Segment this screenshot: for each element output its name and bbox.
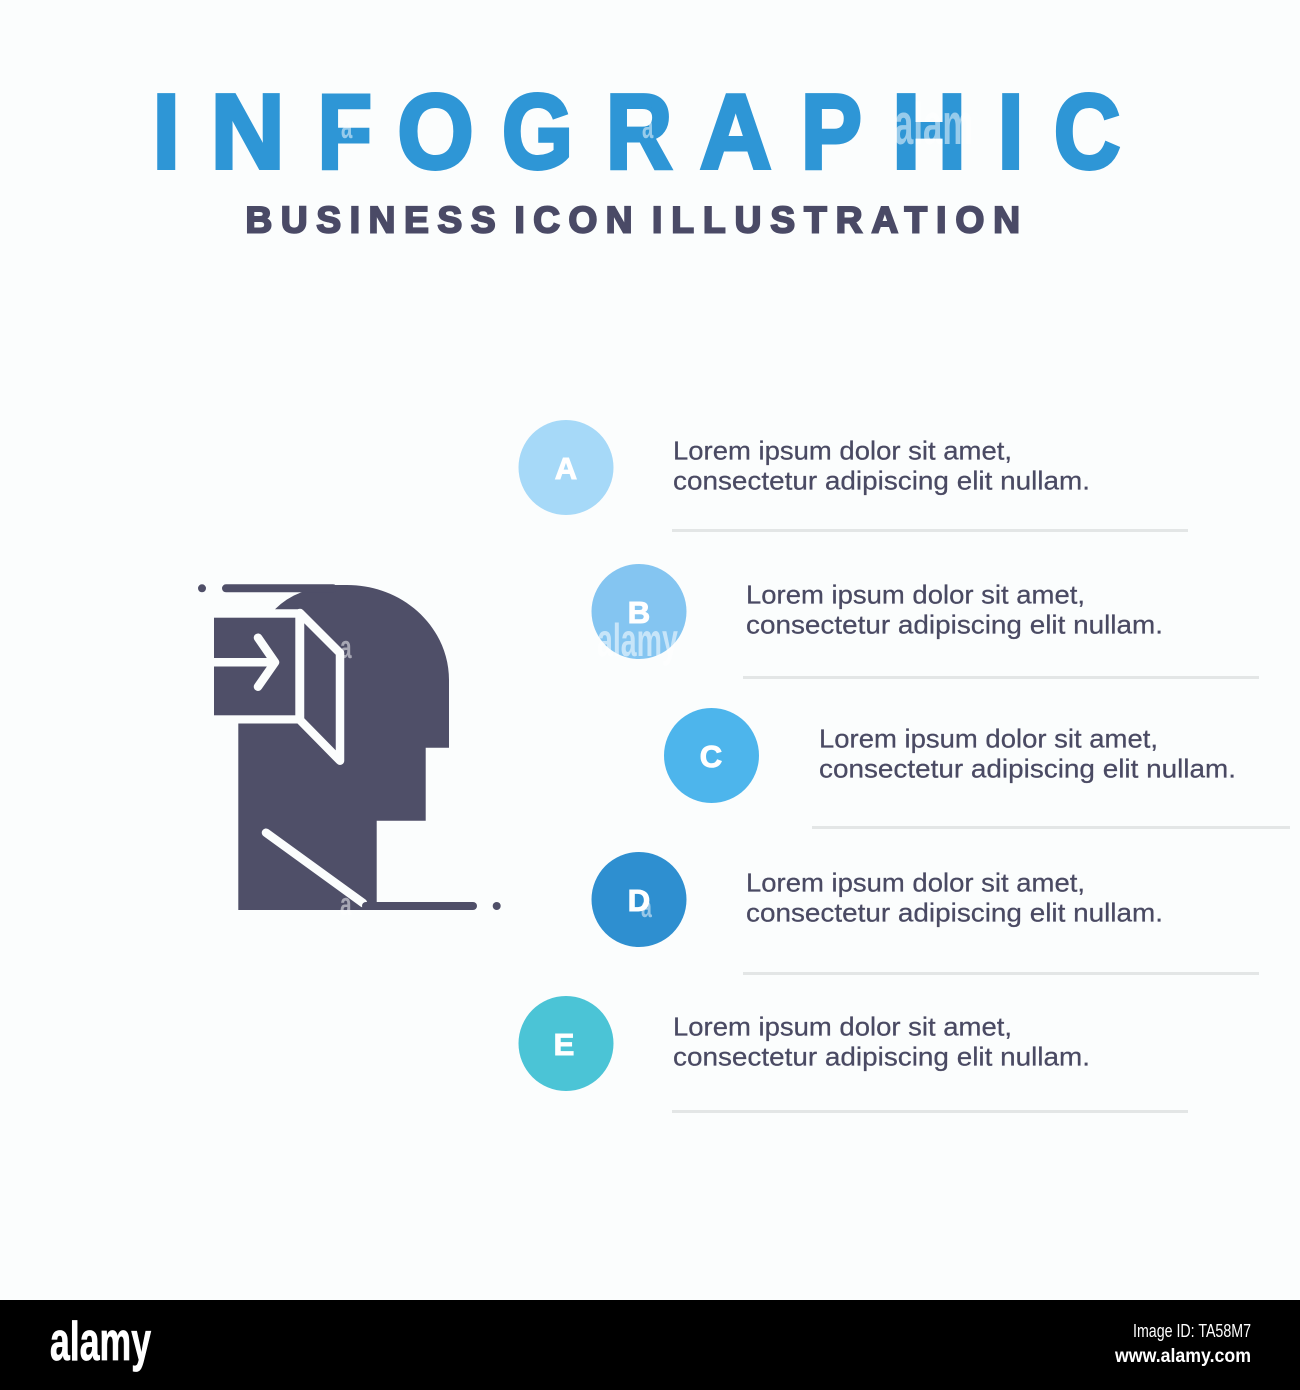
footer bar: [0, 1300, 1300, 1390]
subtitle: BUSINESS ICON ILLUSTRATION: BUSINESS: [246, 200, 496, 241]
title: INFOGRAPHIC: O: [397, 73, 474, 191]
letter A: A: [555, 451, 577, 486]
title: INFOGRAPHIC: A: [700, 72, 772, 191]
text C: [819, 724, 1236, 784]
title: INFOGRAPHIC: C: [1054, 73, 1120, 191]
text D: Lorem ipsum dolor sit amet,: [746, 868, 1085, 898]
text C: consectetur adipiscing elit nullam.: [819, 754, 1236, 784]
circle E: [518, 996, 614, 1091]
website: www.alamy.com: [1114, 1346, 1251, 1367]
icon watermark fragments: a: [340, 630, 352, 665]
icon watermark fragments: [340, 630, 352, 922]
title: INFOGRAPHIC: I: [998, 73, 1024, 191]
step A: [518, 420, 1188, 532]
title: INFOGRAPHIC: R: [606, 73, 672, 192]
text B: [746, 580, 1163, 640]
title watermark fragments: a: [642, 108, 654, 145]
text D: consectetur adipiscing elit nullam.: [746, 898, 1163, 928]
letter D: D: [628, 883, 650, 918]
text E: Lorem ipsum dolor sit amet,: [673, 1012, 1012, 1042]
text E: [673, 1012, 1090, 1072]
text D: [746, 868, 1163, 928]
icon: head with door and arrow: [198, 584, 501, 910]
title: INFOGRAPHIC: I: [152, 72, 180, 191]
text A: Lorem ipsum dolor sit amet,: [673, 436, 1012, 466]
circle B: [592, 564, 686, 659]
title watermark fragments: alam: [894, 93, 973, 157]
icon watermark fragments: a: [340, 887, 352, 922]
subtitle: BUSINESS ICON ILLUSTRATION: ILLUSTRATION: [652, 200, 1020, 241]
subtitle: BUSINESS ICON ILLUSTRATION: [246, 200, 1020, 241]
text E: consectetur adipiscing elit nullam.: [673, 1042, 1090, 1072]
top bar and dot: [226, 584, 333, 592]
text B: consectetur adipiscing elit nullam.: [746, 610, 1163, 640]
step E: [518, 996, 1188, 1113]
title watermark fragments: a: [341, 108, 353, 145]
title: INFOGRAPHIC: H: [892, 73, 966, 191]
door frame: [300, 613, 340, 761]
title: INFOGRAPHIC: N: [211, 74, 285, 191]
letter B: B: [628, 595, 650, 630]
title: INFOGRAPHIC: G: [502, 72, 573, 191]
step D: [592, 852, 1259, 975]
subtitle: BUSINESS ICON ILLUSTRATION: ICON: [514, 200, 632, 241]
letter C: C: [700, 739, 722, 774]
diagonal slash: [266, 833, 363, 903]
bottom bar and dot: [366, 902, 473, 910]
head silhouette: [238, 585, 449, 910]
letter E: E: [554, 1027, 574, 1062]
square with arrow: [214, 618, 295, 715]
arrow: [214, 638, 275, 687]
text A: [673, 436, 1090, 496]
step C: [664, 708, 1290, 829]
title: INFOGRAPHIC: P: [801, 72, 862, 190]
image id: Image ID: TA58M7: [1133, 1321, 1251, 1341]
text B: Lorem ipsum dolor sit amet,: [746, 580, 1085, 610]
title watermark fragments: [341, 93, 973, 157]
circle B watermark: alamy: [597, 615, 678, 667]
text A: consectetur adipiscing elit nullam.: [673, 466, 1090, 496]
step B: [592, 564, 1259, 679]
circle D: [592, 852, 686, 947]
title: INFOGRAPHIC: [152, 72, 1120, 192]
circle C: [664, 708, 759, 803]
title: INFOGRAPHIC: F: [318, 72, 372, 191]
circle D watermark: a: [641, 891, 653, 924]
circle A: [518, 420, 614, 515]
text C: Lorem ipsum dolor sit amet,: [819, 724, 1158, 754]
alamy logo: alamy: [50, 1310, 151, 1372]
